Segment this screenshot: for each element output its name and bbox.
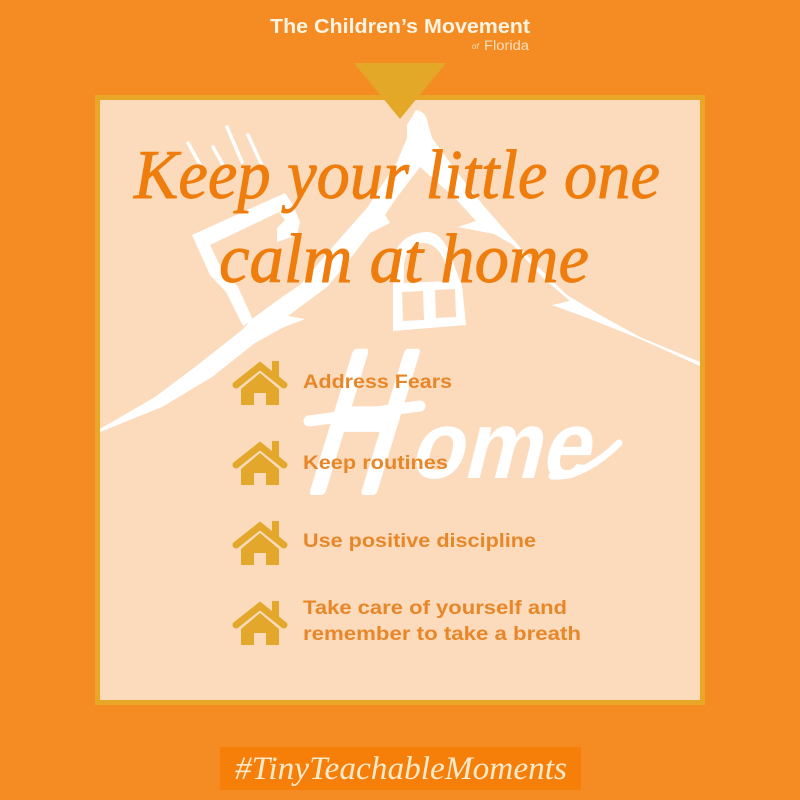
icon: house — [236, 521, 284, 565]
logo: The Children's Movement of Florida — [270, 16, 530, 53]
watermark: Home lettering: H — [291, 312, 438, 533]
panel: main card — [98, 98, 702, 702]
hashtag banner: #TinyTeachableMoments — [235, 751, 567, 787]
list item: Use positive discipline: Use positive discipline — [303, 530, 536, 552]
logo: The Children's Movement of Florida: Florida — [484, 38, 530, 53]
pointer triangle — [354, 63, 446, 119]
watermark: Home lettering — [291, 312, 619, 533]
title: Keep your little one — [133, 137, 660, 214]
title: calm at home — [219, 221, 589, 298]
icon: house — [236, 601, 284, 645]
watermark: house drawing — [100, 110, 700, 533]
icon: house — [236, 361, 284, 405]
watermark: window — [393, 232, 466, 331]
title — [133, 137, 660, 298]
list item: Keep routines: Keep routines — [303, 452, 448, 474]
list item: Take care of yourself: Take care of yourself and — [303, 597, 567, 619]
list item: Address Fears: Address Fears — [303, 371, 452, 393]
watermark: chimney smoke lines — [188, 127, 265, 172]
watermark: Home lettering: ome — [403, 391, 610, 499]
logo: The Children's Movement of Florida: The Children’s Movement — [270, 16, 530, 38]
list item: Keep routines — [236, 441, 448, 485]
watermark: Home lettering swashes — [309, 406, 619, 476]
list item: Use positive discipline — [236, 521, 536, 565]
list item: Take care of yourself: remember to take a breath — [303, 623, 581, 645]
list item: Address Fears — [236, 361, 452, 405]
watermark: roof outline — [100, 110, 700, 432]
watermark: chimney — [192, 193, 300, 326]
list item: Take care of yourself — [236, 597, 581, 645]
logo: The Children's Movement of Florida: of — [472, 42, 479, 51]
icon: house — [236, 441, 284, 485]
